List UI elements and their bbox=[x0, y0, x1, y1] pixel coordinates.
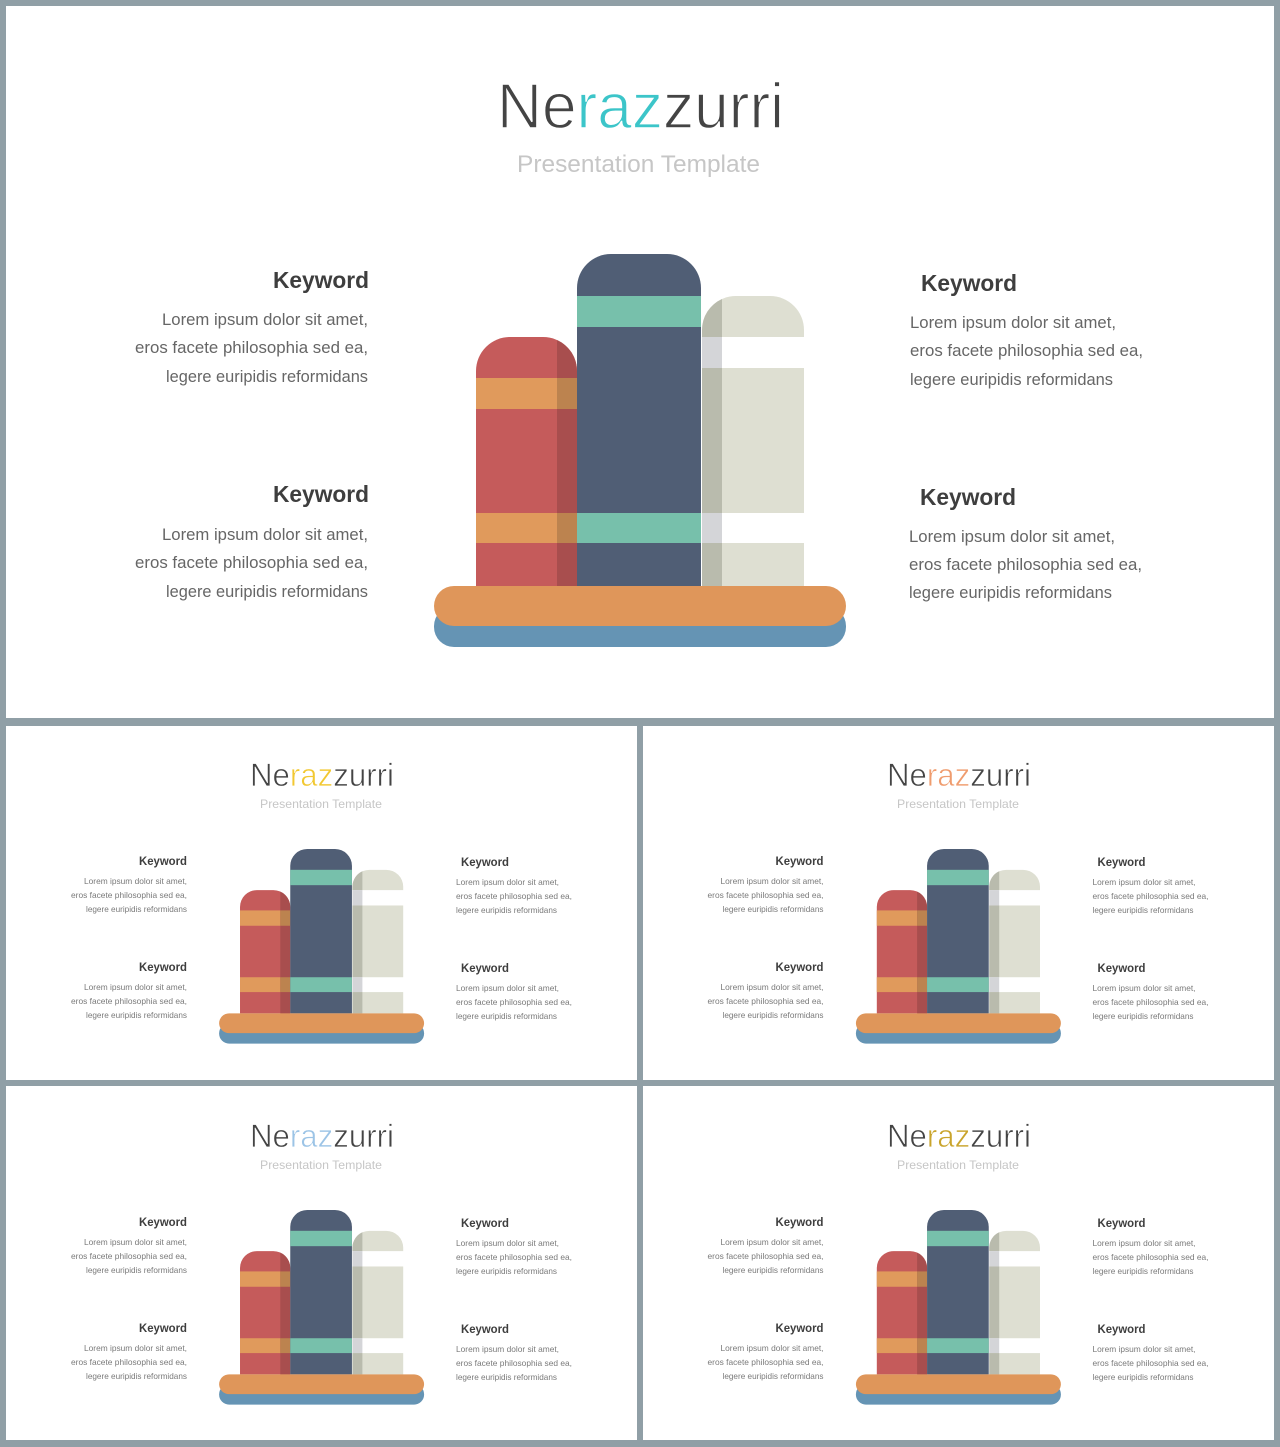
text block: upper left: Lorem ipsum dolor sit amet, bbox=[84, 876, 187, 886]
subtitle: Presentation Template bbox=[897, 1158, 1019, 1172]
text block: lower right: eros facete philosophia sed ea, bbox=[1092, 1358, 1208, 1368]
text block: lower left: legere euripidis reformidans bbox=[86, 1371, 187, 1381]
text block: upper left: Keyword bbox=[273, 267, 369, 293]
panel: small slide gold bbox=[643, 1086, 1274, 1440]
text block: lower right: Lorem ipsum dolor sit amet, bbox=[456, 1344, 559, 1354]
subtitle: Presentation Template bbox=[517, 151, 760, 178]
text block: upper left: eros facete philosophia sed ea, bbox=[71, 890, 187, 900]
panel: small slide yellow bbox=[6, 726, 637, 1080]
text block: upper right: Keyword bbox=[921, 270, 1017, 296]
text block: upper right: legere euripidis reformidans bbox=[456, 1266, 557, 1276]
subtitle: Presentation Template bbox=[260, 1158, 382, 1172]
text block: lower left bbox=[708, 1323, 824, 1381]
text block: upper right: eros facete philosophia sed ea, bbox=[1092, 1252, 1208, 1262]
text block: upper right bbox=[456, 857, 572, 915]
text block: upper right bbox=[1092, 1218, 1208, 1276]
text block: upper right: eros facete philosophia sed ea, bbox=[1092, 891, 1208, 901]
text block: upper left: legere euripidis reformidans bbox=[86, 1265, 187, 1275]
text block: lower right: legere euripidis reformidans bbox=[1092, 1372, 1194, 1382]
text block: lower left: eros facete philosophia sed ea, bbox=[71, 996, 187, 1006]
panel: main slide bbox=[6, 6, 1274, 718]
text block: upper right: Keyword bbox=[461, 857, 509, 869]
text block: lower right: Keyword bbox=[1098, 1324, 1146, 1336]
text block: upper left bbox=[71, 856, 187, 914]
text block: upper left bbox=[708, 1217, 824, 1275]
text block: lower left: legere euripidis reformidans bbox=[86, 1010, 187, 1020]
text block: upper left: eros facete philosophia sed ea, bbox=[71, 1251, 187, 1261]
text block: upper right: Lorem ipsum dolor sit amet, bbox=[1092, 1238, 1196, 1248]
text block: lower right: Keyword bbox=[461, 963, 509, 975]
text block: lower left: Keyword bbox=[776, 962, 824, 974]
text block: upper left: Keyword bbox=[776, 1217, 824, 1229]
text block: upper right: Lorem ipsum dolor sit amet, bbox=[1092, 877, 1196, 887]
text block: upper left: legere euripidis reformidans bbox=[722, 904, 824, 914]
text block: upper left: legere euripidis reformidans bbox=[722, 1265, 824, 1275]
icon: books on shelf bbox=[856, 849, 1061, 1044]
text block: lower left: Lorem ipsum dolor sit amet, bbox=[162, 525, 368, 544]
text block: upper left: Keyword bbox=[139, 1217, 187, 1229]
text block: lower left: legere euripidis reformidans bbox=[722, 1371, 824, 1381]
text block: lower left bbox=[71, 1323, 187, 1381]
text block: upper left: Keyword bbox=[139, 856, 187, 868]
text block: lower right: Lorem ipsum dolor sit amet, bbox=[1092, 983, 1196, 993]
text block: upper right bbox=[1092, 857, 1208, 915]
text block: lower left: legere euripidis reformidans bbox=[166, 582, 368, 601]
text block: lower right: Lorem ipsum dolor sit amet, bbox=[456, 983, 559, 993]
text block: lower right: Lorem ipsum dolor sit amet, bbox=[1092, 1344, 1196, 1354]
text block: lower right: eros facete philosophia sed ea, bbox=[1092, 997, 1208, 1007]
text block: upper right: Lorem ipsum dolor sit amet, bbox=[456, 1238, 559, 1248]
text block: lower left bbox=[71, 962, 187, 1020]
text block: lower left: Keyword bbox=[139, 962, 187, 974]
text block: upper left bbox=[135, 267, 369, 386]
text block: lower right: Keyword bbox=[920, 484, 1016, 510]
text block: lower left: Lorem ipsum dolor sit amet, bbox=[720, 982, 824, 992]
text block: upper right bbox=[456, 1218, 572, 1276]
text block: upper right: Keyword bbox=[461, 1218, 509, 1230]
text block: upper left: eros facete philosophia sed ea, bbox=[135, 338, 368, 357]
text block: upper left: Lorem ipsum dolor sit amet, bbox=[720, 876, 824, 886]
text block: lower right: Lorem ipsum dolor sit amet, bbox=[909, 527, 1115, 546]
text block: lower right: Keyword bbox=[461, 1324, 509, 1336]
subtitle: Presentation Template bbox=[897, 797, 1019, 811]
icon: books on shelf bbox=[219, 1210, 424, 1405]
text block: upper right: eros facete philosophia sed ea, bbox=[456, 891, 572, 901]
text block: upper left: eros facete philosophia sed ea, bbox=[708, 890, 824, 900]
text block: upper left: legere euripidis reformidans bbox=[166, 367, 368, 386]
panel: small slide blue bbox=[6, 1086, 637, 1440]
text block: lower right bbox=[1092, 1324, 1208, 1382]
text block: lower right bbox=[909, 484, 1142, 602]
title: Nerazzurri bbox=[250, 757, 394, 793]
text block: upper left: Lorem ipsum dolor sit amet, bbox=[84, 1237, 187, 1247]
text block: lower left: Keyword bbox=[273, 481, 369, 507]
text block: upper right: Lorem ipsum dolor sit amet, bbox=[456, 877, 559, 887]
text block: upper left bbox=[708, 856, 824, 914]
text block: lower right: legere euripidis reformidans bbox=[456, 1011, 557, 1021]
text block: upper left bbox=[71, 1217, 187, 1275]
text block: lower right bbox=[456, 1324, 572, 1382]
icon: books on shelf bbox=[219, 849, 424, 1044]
text block: lower left: eros facete philosophia sed ea, bbox=[71, 1357, 187, 1367]
text block: upper right: Lorem ipsum dolor sit amet, bbox=[910, 313, 1116, 332]
text block: upper right: eros facete philosophia sed ea, bbox=[910, 341, 1143, 360]
text block: lower left: eros facete philosophia sed ea, bbox=[708, 996, 824, 1006]
text block: lower left bbox=[708, 962, 824, 1020]
icon: books on shelf bbox=[434, 254, 846, 647]
text block: lower left: legere euripidis reformidans bbox=[722, 1010, 824, 1020]
text block: upper right: legere euripidis reformidans bbox=[456, 905, 557, 915]
text block: upper left: legere euripidis reformidans bbox=[86, 904, 187, 914]
text block: lower right bbox=[456, 963, 572, 1021]
text block: upper right: Keyword bbox=[1098, 857, 1146, 869]
text block: upper right: legere euripidis reformidans bbox=[1092, 1266, 1194, 1276]
text block: lower right: legere euripidis reformidans bbox=[456, 1372, 557, 1382]
text block: lower right: eros facete philosophia sed ea, bbox=[456, 1358, 572, 1368]
text block: upper left: Lorem ipsum dolor sit amet, bbox=[162, 310, 368, 329]
text block: lower right: legere euripidis reformidans bbox=[909, 583, 1112, 602]
title: Nerazzurri bbox=[250, 1118, 394, 1154]
title: Nerazzurri bbox=[887, 757, 1031, 793]
text block: lower right: legere euripidis reformidans bbox=[1092, 1011, 1194, 1021]
text block: lower right: Keyword bbox=[1098, 963, 1146, 975]
title: Nerazzurri bbox=[497, 70, 784, 142]
text block: lower left: Lorem ipsum dolor sit amet, bbox=[84, 1343, 187, 1353]
text block: upper right: eros facete philosophia sed ea, bbox=[456, 1252, 572, 1262]
text block: upper right bbox=[910, 270, 1143, 389]
text block: lower left: eros facete philosophia sed ea, bbox=[135, 553, 368, 572]
text block: lower left: Lorem ipsum dolor sit amet, bbox=[84, 982, 187, 992]
text block: upper left: Keyword bbox=[776, 856, 824, 868]
title: Nerazzurri bbox=[887, 1118, 1031, 1154]
text block: lower right: eros facete philosophia sed ea, bbox=[909, 555, 1142, 574]
text block: lower left bbox=[135, 481, 369, 601]
icon: books on shelf bbox=[856, 1210, 1061, 1405]
text block: upper right: legere euripidis reformidans bbox=[910, 370, 1113, 389]
text block: upper right: Keyword bbox=[1098, 1218, 1146, 1230]
text block: lower left: Keyword bbox=[139, 1323, 187, 1335]
text block: lower left: Keyword bbox=[776, 1323, 824, 1335]
subtitle: Presentation Template bbox=[260, 797, 382, 811]
panel: small slide orange bbox=[643, 726, 1274, 1080]
text block: lower left: Lorem ipsum dolor sit amet, bbox=[720, 1343, 824, 1353]
text block: lower right bbox=[1092, 963, 1208, 1021]
text block: lower right: eros facete philosophia sed ea, bbox=[456, 997, 572, 1007]
text block: upper left: eros facete philosophia sed ea, bbox=[708, 1251, 824, 1261]
text block: upper right: legere euripidis reformidans bbox=[1092, 905, 1194, 915]
text block: lower left: eros facete philosophia sed ea, bbox=[708, 1357, 824, 1367]
text block: upper left: Lorem ipsum dolor sit amet, bbox=[720, 1237, 824, 1247]
